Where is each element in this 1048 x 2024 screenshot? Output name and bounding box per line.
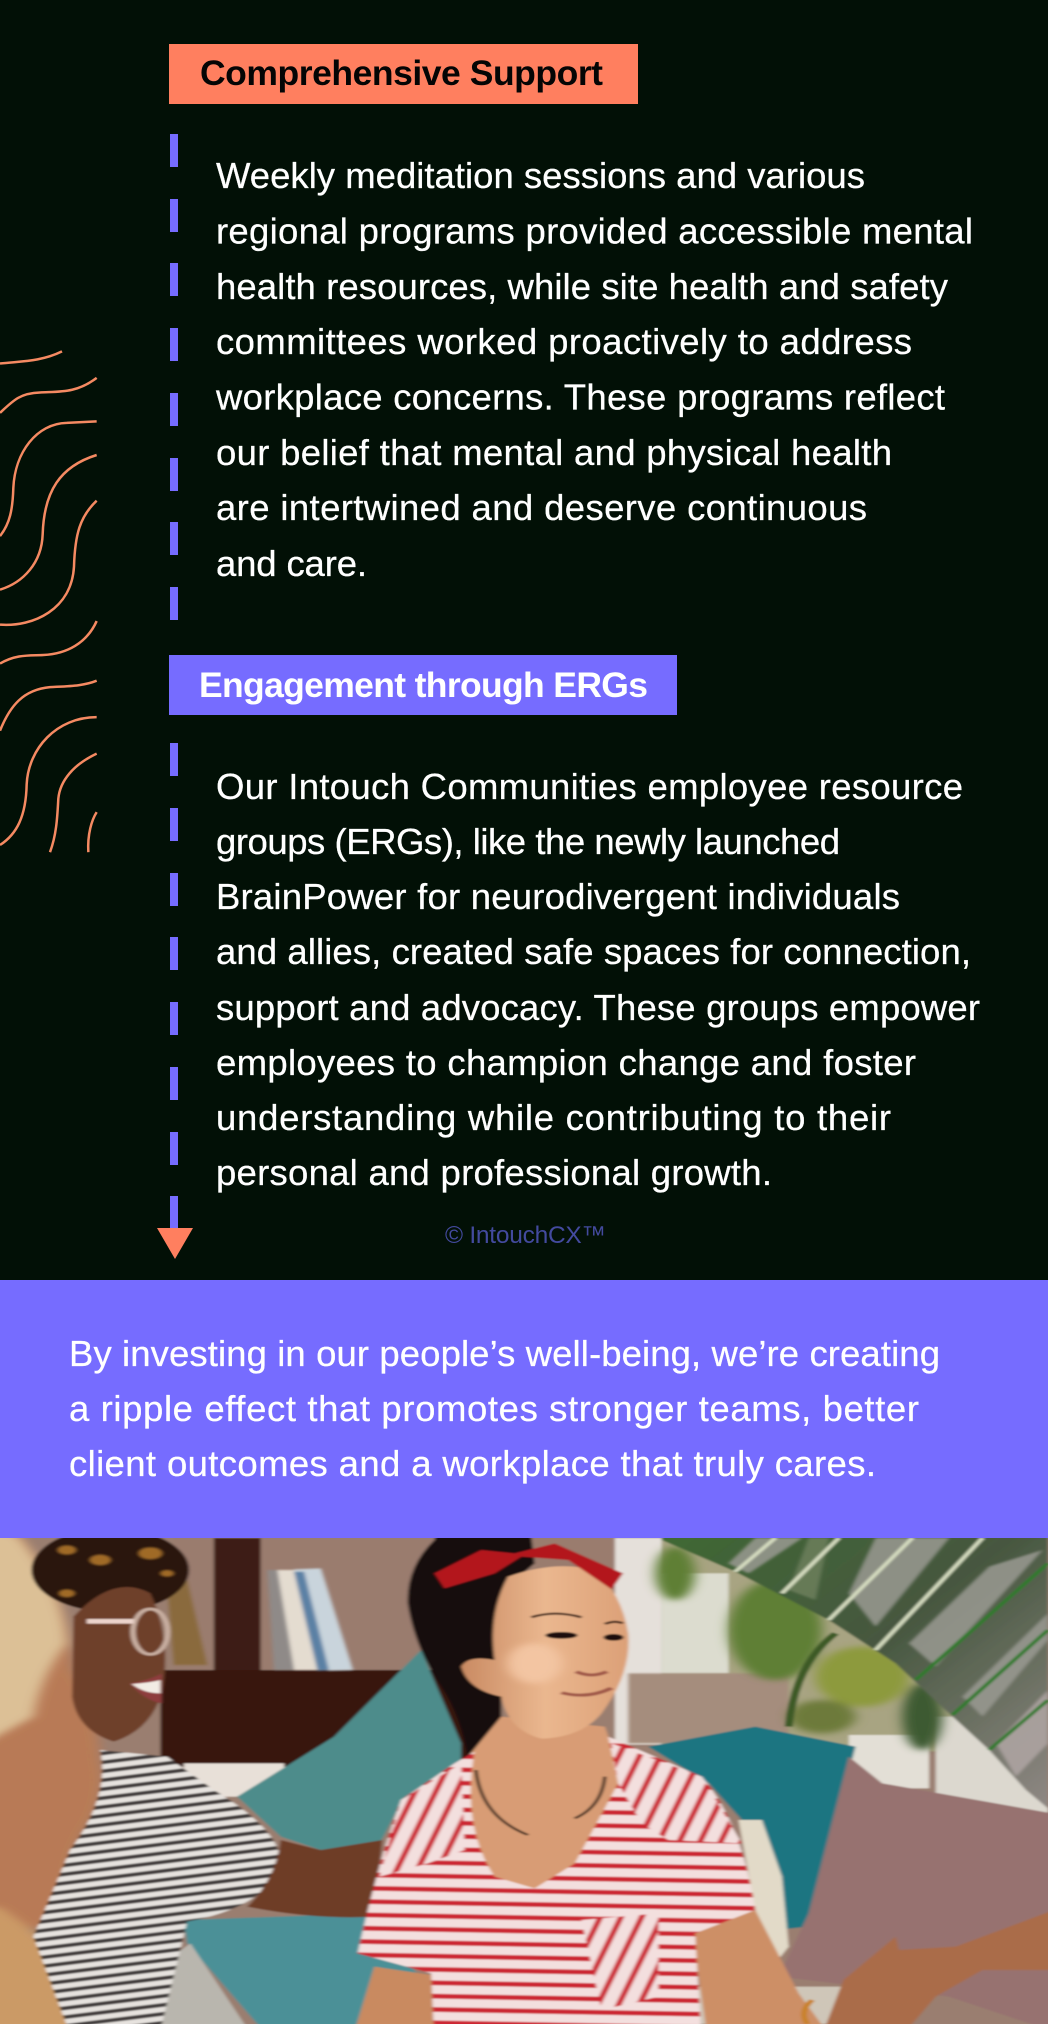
text block: Comprehensive Support: workplace concerns. These programs reflect (215, 376, 945, 418)
red scrunchie (434, 1543, 623, 1589)
closing callout band: a ripple effect that promotes stronger teams, better (69, 1388, 919, 1429)
nose and mouth (561, 1672, 612, 1695)
woman with glasses (31, 1528, 382, 2024)
face (461, 1566, 629, 1739)
arms (351, 1967, 434, 2024)
plant stem (789, 1633, 835, 1727)
heading: Engagement through ERGs (169, 655, 677, 715)
brows (531, 1614, 623, 1624)
striped shirt (33, 1750, 281, 2024)
text block: Engagement through ERGs: Our Intouch Communities employee resource (216, 766, 963, 807)
wave decoration (0, 351, 97, 852)
text block: Comprehensive Support: health resources, while site health and safety (216, 266, 949, 307)
text block: Comprehensive Support: our belief that mental and physical health (216, 432, 892, 473)
closing callout band: client outcomes and a workplace that truly cares. (69, 1443, 876, 1484)
clasped hands (819, 1897, 1048, 2024)
shirt shoulders (380, 1763, 465, 1877)
eyes (545, 1632, 624, 1641)
text block: Comprehensive Support: and care. (216, 543, 367, 584)
heading: Engagement through ERGs: Engagement through ERGs (199, 665, 648, 705)
text block: Comprehensive Support: committees worked proactively to address (216, 321, 912, 362)
woman in red striped shirt (351, 1510, 835, 2024)
cheek highlight (508, 1643, 561, 1683)
text block: Comprehensive Support (215, 155, 973, 584)
leaf graphic (662, 1510, 1048, 1808)
necklace hair strand (476, 1770, 605, 1835)
room backdrop (0, 1510, 1048, 2024)
arm (247, 1840, 382, 1917)
blurred foreground person (0, 1510, 140, 2024)
plant (655, 1547, 942, 1750)
text block: Engagement through ERGs: understanding while contributing to their (216, 1097, 891, 1138)
text block: Engagement through ERGs (216, 766, 980, 1193)
smile (130, 1673, 162, 1703)
copyright: © IntouchCX™ (445, 1222, 606, 1249)
books (167, 1568, 353, 1671)
text block: Engagement through ERGs: BrainPower for neurodivergent individuals (216, 876, 900, 917)
hair (31, 1528, 189, 1612)
neck and chest (464, 1717, 625, 1895)
text block: Engagement through ERGs: support and advocacy. These groups empower (216, 987, 980, 1028)
pink pillow (779, 1757, 1048, 2024)
hair (408, 1510, 535, 1760)
photo: friends smiling on a sofa (0, 1510, 1048, 2024)
closing callout band: By investing in our people’s well-being, we’re creating (69, 1333, 940, 1374)
glasses (87, 1609, 168, 1654)
text block: Engagement through ERGs: and allies, created safe spaces for connection, (216, 931, 971, 972)
face (72, 1587, 165, 1742)
shirt (358, 1737, 755, 2024)
text block: Comprehensive Support: are intertwined and deserve continuous (216, 487, 867, 528)
text block: Engagement through ERGs: groups (ERGs), like the newly launched (216, 821, 840, 862)
heading: Comprehensive Support (169, 44, 638, 104)
teal pillow (237, 1650, 461, 1850)
text block: Comprehensive Support: Weekly meditation sessions and various (216, 155, 865, 196)
closing callout band (0, 1280, 1048, 1538)
heading: Comprehensive Support: Comprehensive Support (200, 53, 603, 93)
text block: Engagement through ERGs: personal and professional growth. (216, 1152, 772, 1193)
bracelet (804, 2000, 812, 2024)
dashed timeline arrow (157, 134, 193, 1259)
teal blanket (648, 1727, 856, 1930)
text block: Engagement through ERGs: employees to champion change and foster (216, 1042, 916, 1083)
text block: Comprehensive Support: regional programs provided accessible mental (216, 210, 973, 252)
